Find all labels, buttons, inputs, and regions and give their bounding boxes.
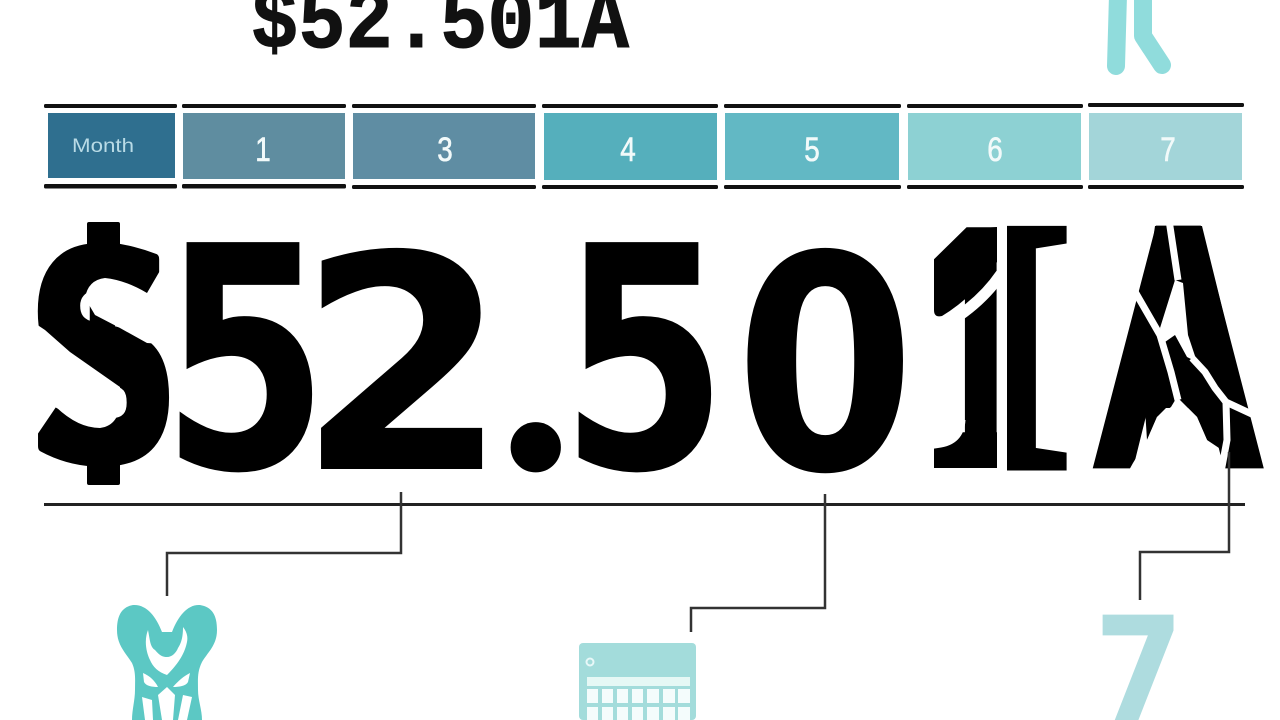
cell: month label	[48, 113, 175, 178]
big amount: 5	[161, 180, 329, 542]
big glyph: 1 with split: I	[934, 143, 1076, 548]
big glyph: dollar sign: $	[24, 158, 181, 539]
cell: 5	[725, 113, 899, 180]
connector: right	[1140, 452, 1229, 600]
cell: 7: 7	[1160, 130, 1176, 169]
big glyph: 1 with split	[934, 226, 1067, 470]
big amount: 2	[297, 193, 509, 539]
big glyph: 1 with split: 1	[911, 152, 1039, 542]
icon: cropped legs	[1116, 0, 1162, 66]
big amount: 5	[560, 180, 728, 542]
connector: center	[691, 494, 825, 632]
cell: 4	[544, 113, 717, 180]
cell: 5: 5	[804, 130, 820, 169]
cell: 1	[183, 113, 345, 179]
cell: 3	[353, 113, 535, 179]
cell: month label: Month	[72, 136, 134, 157]
cell: 6: 6	[987, 130, 1003, 169]
baseline rule	[44, 503, 1245, 506]
strip rules: top and bottom	[44, 103, 1244, 189]
cell: 4: 4	[620, 130, 636, 169]
icon: calendar	[579, 643, 696, 720]
big amount: 0	[735, 193, 915, 539]
big glyph: dollar sign	[38, 222, 170, 485]
big glyph: A with cracks: A	[1090, 155, 1267, 539]
cell: 6	[908, 113, 1081, 180]
month strip	[44, 103, 1244, 189]
cell: 1: 1	[255, 130, 271, 169]
big amount	[38, 222, 1264, 485]
big amount: .	[497, 193, 574, 536]
connector: left	[167, 492, 401, 596]
cell: 3: 3	[437, 130, 453, 169]
cell: 7	[1089, 113, 1242, 180]
icon: pelvis	[117, 605, 217, 720]
